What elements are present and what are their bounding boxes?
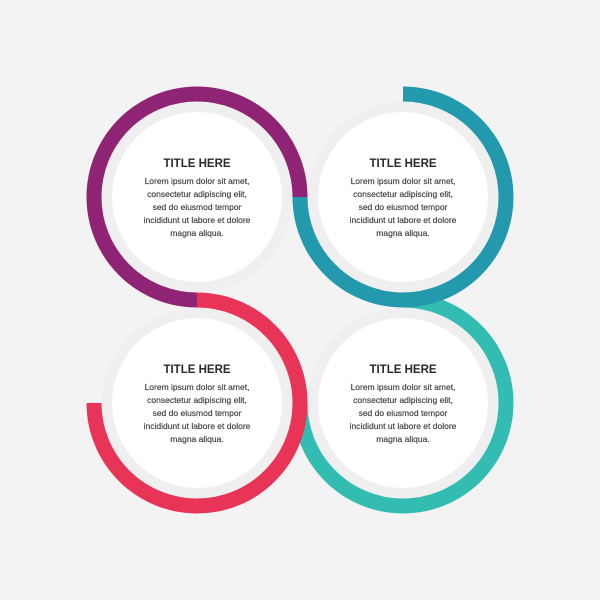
- text: top-left: Lorem ipsum dolor sit amet,: [145, 176, 249, 186]
- arc: red: [94, 300, 300, 506]
- text: top-right: consectetur adipiscing elit,: [353, 189, 453, 199]
- text: bottom-left: magna aliqua.: [170, 434, 224, 444]
- text: top-left: consectetur adipiscing elit,: [147, 189, 247, 199]
- text: bottom-right: sed do eiusmod tempor: [359, 408, 447, 418]
- text: bottom-right: Lorem ipsum dolor sit amet,: [351, 382, 455, 392]
- text: bottom-right: TITLE HERE: [369, 364, 437, 376]
- text: top-left: [144, 158, 250, 238]
- text: top-right: incididunt ut labore et dolore: [350, 215, 456, 225]
- text: bottom-right: consectetur adipiscing elit,: [353, 395, 453, 405]
- text: top-right: TITLE HERE: [369, 158, 437, 170]
- text: bottom-right: [350, 364, 456, 444]
- text: bottom-left: Lorem ipsum dolor sit amet,: [145, 382, 249, 392]
- arc: purple: [94, 94, 300, 300]
- text: bottom-right: incididunt ut labore et dolore: [350, 421, 456, 431]
- text: top-left: incididunt ut labore et dolore: [144, 215, 250, 225]
- text: bottom-left: incididunt ut labore et dolore: [144, 421, 250, 431]
- text: bottom-left: TITLE HERE: [163, 364, 231, 376]
- inner discs: [102, 102, 498, 498]
- text: bottom-left: sed do eiusmod tempor: [153, 408, 241, 418]
- text: top-right: sed do eiusmod tempor: [359, 202, 447, 212]
- text: top-right: [350, 158, 456, 238]
- text: top-left: magna aliqua.: [170, 228, 224, 238]
- text: top-right: Lorem ipsum dolor sit amet,: [351, 176, 455, 186]
- text: top-left: TITLE HERE: [163, 158, 231, 170]
- text: bottom-left: consectetur adipiscing elit,: [147, 395, 247, 405]
- text: top-left: sed do eiusmod tempor: [153, 202, 241, 212]
- text: top-right: magna aliqua.: [376, 228, 430, 238]
- text: bottom-right: magna aliqua.: [376, 434, 430, 444]
- arc: teal: [300, 300, 506, 506]
- arc: blue: [300, 94, 506, 300]
- text: bottom-left: [144, 364, 250, 444]
